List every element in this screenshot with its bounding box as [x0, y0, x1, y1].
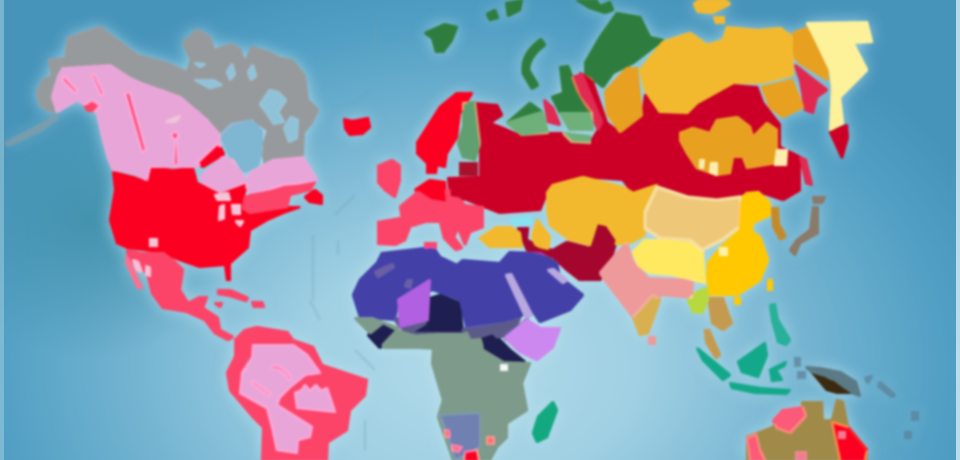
North America	[5, 27, 322, 340]
faint mid-ocean ridges and islands	[246, 20, 376, 450]
Black Sea highlight	[508, 215, 534, 226]
Australia	[747, 400, 867, 460]
Iceland	[344, 118, 370, 135]
Asia	[480, 177, 825, 394]
Africa and Arabia	[353, 247, 583, 460]
South America	[227, 327, 367, 460]
Europe and Russia	[378, 0, 872, 250]
New Guinea and Oceania	[795, 358, 918, 438]
